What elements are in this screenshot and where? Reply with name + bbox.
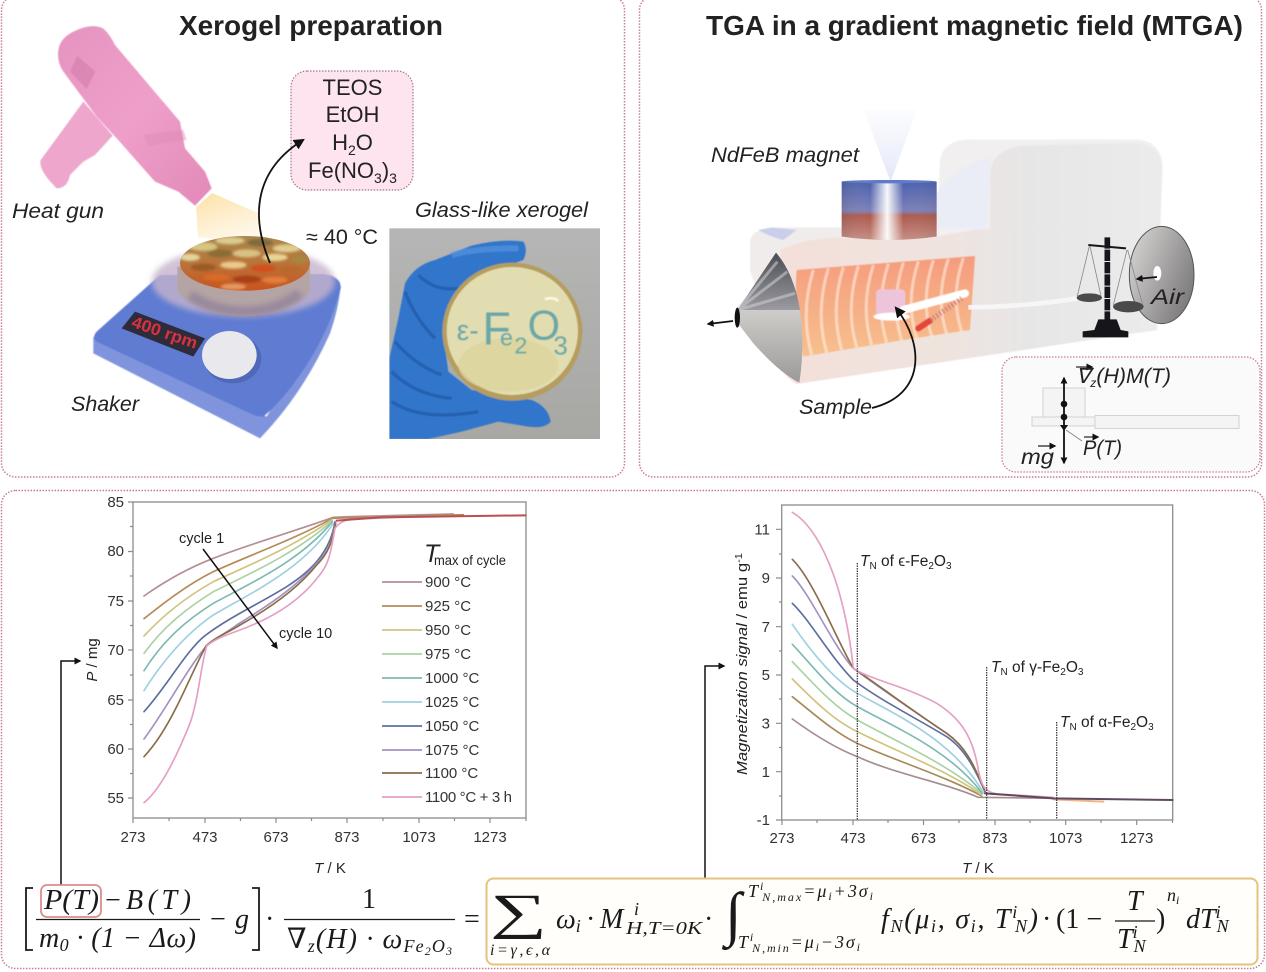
photo: gloved hand holding xerogel: e (500, 325, 513, 351)
icon: heat beam (196, 193, 262, 245)
equation: highlighted right-hand side: i (971, 916, 976, 936)
label: heat gun: Heat gun (12, 200, 104, 223)
equation: highlighted right-hand side: ( (904, 904, 915, 935)
annotation: Neel temperature epsilon: 3 (946, 561, 952, 572)
annotation: cycle 10: cycle 10 (279, 626, 332, 642)
equation: highlighted right-hand side (486, 878, 1258, 964)
y axis tick labels: 85 (107, 494, 124, 511)
x axis tick labels: 473 (192, 829, 218, 846)
equation: highlighted right-hand side: ) (1156, 904, 1165, 935)
photo: gloved hand holding xerogel: O (528, 301, 560, 348)
photo: gloved hand holding xerogel: F (482, 302, 511, 354)
icon: heat gun (40, 26, 212, 206)
annotation: Neel temperature alpha: of α-Fe (1077, 714, 1130, 731)
text box: precursors: Fe(NO (308, 158, 374, 183)
annotation: Neel temperature epsilon: O (934, 553, 946, 570)
equation: highlighted right-hand side: N,max (761, 890, 802, 904)
equation: left-hand side: 1 (362, 884, 376, 915)
axis title: magnetization signal: Magnetization signal / emu g (734, 569, 751, 775)
equation: highlighted right-hand side: dT (1186, 904, 1216, 935)
cone outlet (735, 253, 802, 383)
arrow: model to magnetization chart (705, 666, 724, 878)
equation: highlighted right-hand side: f (881, 904, 889, 935)
legend: 1000 °C (425, 670, 480, 687)
text box: precursors (291, 71, 413, 190)
annotation: cycle 1: cycle 1 (179, 531, 224, 547)
arrow: cycle direction (203, 549, 277, 648)
y axis tick labels: 7 (762, 619, 770, 636)
equation: left-hand side: 0 (60, 935, 69, 955)
equation: left-hand side: 3 (445, 944, 452, 958)
equation: highlighted right-hand side: N (1014, 916, 1028, 936)
equation: left-hand side: ∇ (287, 924, 307, 955)
knob (202, 331, 261, 383)
x axis tick labels: 873 (982, 830, 1008, 847)
legend: 1025 °C (425, 694, 480, 711)
y axis tick labels: 3 (762, 716, 770, 732)
text box: precursors: TEOS (323, 75, 382, 100)
panel: Xerogel preparation (2, 0, 624, 477)
illustration: MTGA furnace (735, 110, 1194, 384)
equation: highlighted right-hand side: , (977, 904, 993, 935)
equation: highlighted right-hand side: i (760, 879, 763, 893)
equation: highlighted right-hand side: · (1042, 904, 1051, 935)
label: temperature: ≈ 40 °C (306, 226, 378, 249)
axis title: P / mg: P / mg (84, 638, 101, 682)
annotation: Neel temperature epsilon: N (869, 561, 877, 572)
x axis tick labels: 873 (334, 829, 360, 846)
text box: precursors: O (356, 130, 373, 155)
lower housing (750, 227, 1157, 384)
coil (796, 256, 975, 357)
annotation: Neel temperature gamma: T (991, 659, 1002, 676)
display: 400 rpm: 400 rpm (129, 312, 200, 353)
label: air: Air (1148, 286, 1185, 309)
equation: highlighted right-hand side: T (738, 932, 748, 952)
panel: TGA in a gradient magnetic field (640, 0, 1262, 477)
label: shaker: Shaker (71, 393, 140, 416)
label: magnetic force: z (1089, 376, 1096, 390)
arrow: dish to precursors (259, 140, 303, 263)
equation: highlighted right-hand side: ω (556, 904, 576, 935)
equation: highlighted right-hand side: −3σ (821, 932, 856, 952)
equation: highlighted right-hand side: i (857, 940, 860, 954)
equation: highlighted right-hand side: T (995, 904, 1010, 935)
equation: highlighted right-hand side: T (1117, 924, 1133, 955)
x axis tick labels: 1273 (1120, 830, 1153, 847)
arrow: sample pointer (872, 308, 915, 408)
curves: ten cycles (792, 512, 1173, 802)
equation: highlighted right-hand side: i (1012, 902, 1017, 922)
display: 400 rpm (122, 312, 205, 357)
equation: highlighted right-hand side: i (870, 889, 873, 903)
equation: highlighted right-hand side: ∑ (490, 885, 547, 940)
icon: shaker (93, 274, 341, 438)
equation: highlighted right-hand side: i (931, 916, 936, 936)
equation: highlighted right-hand side: N (889, 916, 903, 936)
x axis tick labels (769, 830, 1153, 847)
photo: gloved hand holding xerogel: ε- (457, 315, 479, 347)
icon: petri dish with gel (152, 236, 335, 317)
equation: highlighted right-hand side: n (1167, 885, 1176, 905)
equation: highlighted right-hand side: · (586, 904, 595, 935)
disk (1129, 226, 1194, 324)
axis title: T / K: T / K (314, 860, 346, 877)
equation: left-hand side: g (235, 904, 249, 935)
equation: left-hand side: ω) (166, 923, 196, 954)
dotted marker: alpha (1056, 722, 1058, 819)
equation: highlighted right-hand side: =μ (791, 932, 814, 952)
y axis tick labels: 55 (107, 790, 124, 807)
y axis tick labels: 75 (107, 593, 124, 610)
equation: highlighted right-hand side: i (634, 899, 639, 919)
equation: highlighted right-hand side: i (1176, 893, 1179, 907)
legend: 950 °C (425, 622, 471, 639)
equation: highlighted right-hand side: i (1216, 902, 1221, 922)
equation: left-hand side (26, 884, 480, 958)
text box: precursors: 3 (389, 170, 397, 186)
equation: highlighted right-hand side: i (1133, 922, 1138, 942)
highlight: P(T) (41, 885, 101, 917)
field cone (863, 110, 917, 182)
equation: highlighted right-hand side: i (750, 930, 753, 944)
equation: highlighted right-hand side: i (828, 889, 832, 903)
equation: highlighted right-hand side: M (599, 904, 625, 935)
y axis tick labels: 1 (762, 764, 770, 781)
equation: highlighted right-hand side: N,min (751, 941, 789, 955)
equation: left-hand side: P(T) (43, 885, 99, 916)
text box: precursors: H (332, 130, 348, 155)
arrow: outlet (708, 321, 733, 324)
photo: gloved hand holding xerogel: 2 (514, 332, 527, 358)
equation: highlighted right-hand side: T (748, 881, 758, 901)
equation: highlighted right-hand side: (1 − (1056, 904, 1102, 935)
y axis tick labels (107, 494, 124, 807)
dotted marker: epsilon (856, 563, 858, 820)
label: mg: mg (1021, 446, 1054, 469)
legend: 1050 °C (425, 718, 480, 735)
chart: P versus T (84, 494, 526, 877)
annotation: Neel temperature gamma: 3 (1078, 667, 1084, 678)
equation: left-hand side: 2 (425, 944, 431, 958)
equation: highlighted right-hand side: N (1216, 916, 1230, 936)
y axis tick labels: 65 (107, 692, 124, 709)
y axis tick labels (754, 522, 770, 829)
equation: highlighted right-hand side: i=γ,ϵ,α (490, 942, 551, 959)
annotation: Neel temperature epsilon: 2 (928, 561, 934, 572)
photo: gloved hand holding xerogel (389, 228, 600, 439)
equation: highlighted right-hand side: μ (915, 904, 929, 935)
equation: left-hand side: O (432, 936, 445, 956)
text box: precursors: ) (382, 158, 389, 183)
equation: highlighted right-hand side: i (576, 916, 581, 936)
label: NdFeB magnet: NdFeB magnet (711, 144, 860, 167)
equation: highlighted right-hand side: · (704, 904, 713, 935)
equation: highlighted right-hand side: ) (1027, 904, 1038, 935)
upper housing (937, 139, 1163, 343)
photo: gloved hand holding xerogel: 3 (553, 330, 568, 360)
y axis tick labels: 60 (107, 741, 124, 758)
y axis tick labels: 11 (754, 522, 770, 538)
equation: left-hand side: H) · ω (326, 924, 402, 955)
axis title: T / K: T / K (962, 860, 994, 877)
equation: left-hand side: B(T) (126, 885, 191, 916)
panel: results and model (2, 490, 1264, 968)
text box: precursors: 3 (374, 170, 382, 186)
legend (382, 540, 512, 806)
label: glass-like xerogel: Glass-like xerogel (415, 199, 589, 222)
force arrows (1060, 378, 1082, 463)
x axis tick labels (120, 829, 507, 846)
annotation: Neel temperature alpha: N (1069, 722, 1077, 733)
x axis tick labels: 673 (911, 830, 936, 847)
legend: 1100 °C + 3 h (425, 789, 512, 806)
equation: highlighted right-hand side: ∫ (722, 881, 745, 951)
inset: force balance (1002, 357, 1260, 472)
legend: T (424, 540, 441, 568)
equation: highlighted right-hand side: , (938, 904, 954, 935)
y axis tick labels: 5 (762, 667, 770, 684)
equation: left-hand side: · (265, 904, 274, 935)
heading: Xerogel preparation: Xerogel preparation (179, 10, 443, 41)
y axis tick labels: 80 (107, 543, 124, 560)
legend: 1075 °C (425, 742, 480, 759)
balance tube (968, 298, 1078, 307)
label: magnetic force: (H)M(T) (1096, 365, 1171, 388)
x axis tick labels: 273 (120, 829, 146, 846)
dotted marker: gamma (986, 667, 988, 820)
equation: left-hand side: Fe (402, 936, 424, 956)
axis title: magnetization signal: -1 (734, 553, 745, 563)
equation: highlighted right-hand side: σ (955, 904, 969, 935)
equation: highlighted right-hand side: =μ (803, 881, 826, 901)
label: sample: Sample (799, 396, 872, 419)
y axis tick labels: 70 (107, 642, 124, 659)
legend: 925 °C (425, 598, 471, 615)
arrow: P(T) to chart (61, 661, 80, 885)
annotation: Neel temperature alpha: 2 (1130, 722, 1136, 733)
annotation: Neel temperature epsilon: T (860, 553, 871, 570)
y axis tick labels: 9 (762, 570, 770, 587)
y axis tick labels: -1 (757, 812, 770, 829)
chart: magnetization signal versus T (734, 505, 1173, 877)
arrow: air inlet (1137, 277, 1157, 279)
equation: left-hand side: m (39, 923, 59, 954)
equation: highlighted right-hand side: T (1127, 886, 1145, 917)
label: magnetic force: ∇ (1076, 365, 1090, 388)
equation: left-hand side: ( (316, 924, 327, 955)
x axis tick labels: 1273 (473, 829, 507, 846)
annotation: Neel temperature gamma: of γ-Fe (1008, 659, 1060, 676)
equation: left-hand side: − (210, 904, 226, 935)
sample holder (873, 289, 965, 328)
equation: left-hand side: = (464, 904, 480, 935)
text box: precursors: EtOH (326, 102, 379, 127)
legend: 1100 °C (425, 765, 478, 782)
magnet cylinder (841, 180, 937, 240)
text box: precursors: 2 (348, 142, 356, 158)
legend: 900 °C (425, 574, 471, 591)
annotation: Neel temperature alpha: T (1060, 714, 1071, 731)
annotation: Neel temperature alpha: 3 (1148, 722, 1154, 733)
annotation: Neel temperature epsilon: of ϵ-Fe (877, 553, 928, 570)
sketch: sample holder (1032, 388, 1239, 428)
legend: 975 °C (425, 646, 471, 663)
legend: max of cycle (434, 552, 506, 568)
equation: left-hand side: z (307, 936, 315, 956)
equation: left-hand side: · (1 − Δ (69, 923, 166, 954)
annotation: Neel temperature gamma: N (1000, 667, 1008, 678)
x axis tick labels: 1073 (1049, 830, 1082, 847)
balance (1077, 237, 1144, 337)
x axis tick labels: 1073 (402, 829, 436, 846)
curves: ten cycles (144, 514, 526, 803)
annotation: Neel temperature gamma: 2 (1060, 667, 1066, 678)
equation: highlighted right-hand side: N (1133, 936, 1147, 956)
label: P(T): P(T) (1083, 437, 1122, 460)
heading: MTGA: TGA in a gradient magnetic field (MTGA) (706, 10, 1243, 41)
equation: highlighted right-hand side: H,T=0K (625, 918, 703, 938)
annotation: Neel temperature gamma: O (1066, 659, 1078, 676)
x axis tick labels: 673 (263, 829, 289, 846)
equation: highlighted right-hand side: +3σ (834, 881, 869, 901)
annotation: Neel temperature alpha: O (1136, 714, 1148, 731)
x axis tick labels: 473 (840, 830, 866, 847)
equation: highlighted right-hand side: i (816, 940, 819, 954)
equation: left-hand side: − (105, 885, 121, 916)
x axis tick labels: 273 (769, 830, 795, 847)
